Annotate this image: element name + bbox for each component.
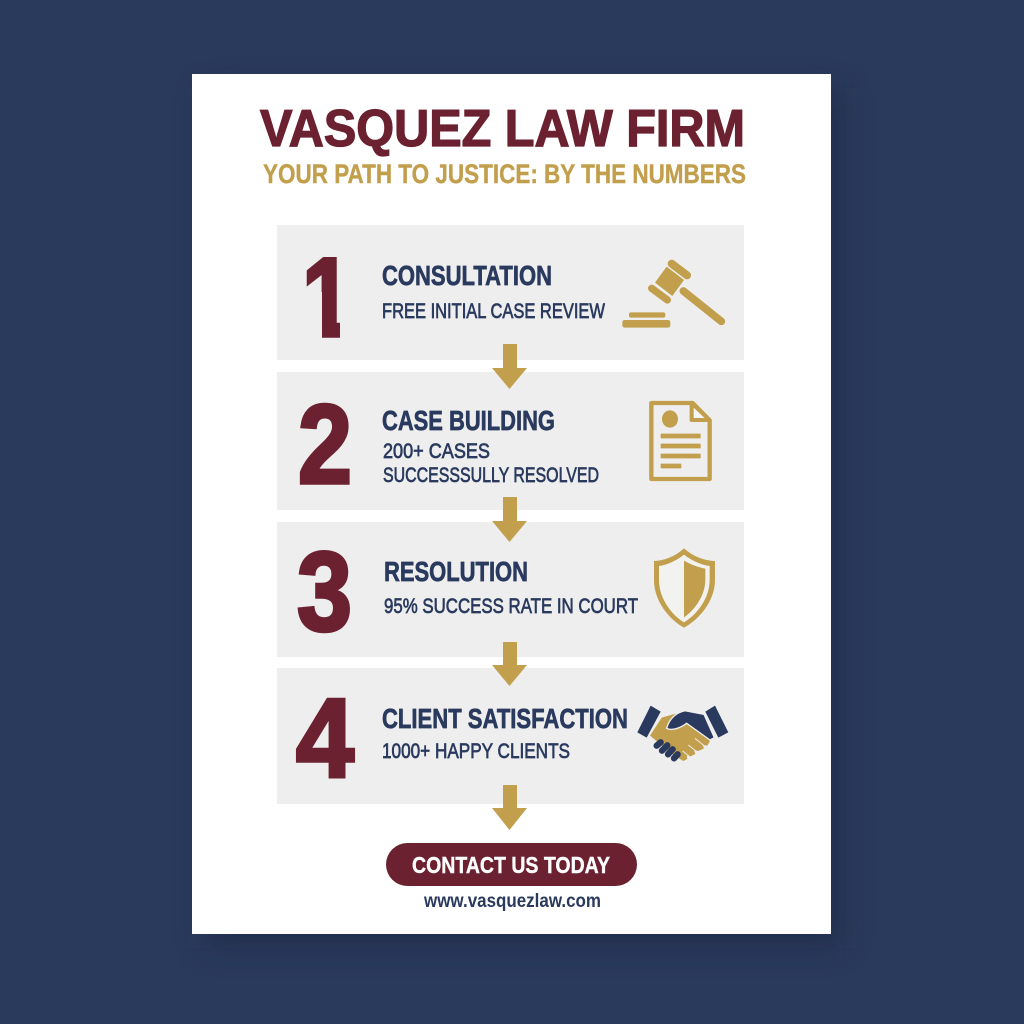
panel: step 3 resolution: [277, 522, 744, 657]
subtitle: YOUR PATH TO JUSTICE: BY THE NUMBERS: [263, 159, 746, 189]
arrow 3: [492, 642, 527, 686]
website url: www.vasquezlaw.com: [423, 891, 601, 912]
button: contact us today: [386, 843, 637, 886]
text: 1000+ happy clients: 1000+ HAPPY CLIENTS: [382, 740, 570, 763]
text: 200+ cases: 200+ CASES: [383, 440, 490, 463]
heading: resolution: RESOLUTION: [384, 556, 528, 587]
heading: client satisfaction: CLIENT SATISFACTION: [382, 703, 628, 734]
arrow 1: [492, 344, 527, 389]
panel: step 4 client satisfaction: [277, 668, 744, 804]
icon: document: [651, 403, 710, 479]
text: successfully resolved: SUCCESSSULLY RESOLVED: [383, 464, 599, 487]
text: 95% success rate: 95% SUCCESS RATE IN COURT: [384, 595, 638, 618]
panel: step 1 consultation: [277, 225, 744, 360]
number 1: 1: [302, 235, 352, 360]
panel: poster card: [192, 74, 831, 934]
arrow 2: [492, 497, 527, 542]
heading: case building: CASE BUILDING: [382, 405, 555, 436]
button: contact us today: CONTACT US TODAY: [412, 852, 610, 878]
number 3: 3: [297, 529, 352, 654]
icon: shield: [654, 548, 715, 628]
icon: gavel: [622, 264, 721, 328]
number 4: 4: [296, 676, 354, 801]
arrow 4: [492, 785, 527, 830]
number 2: 2: [298, 382, 352, 507]
title: VASQUEZ LAW FIRM: [260, 100, 745, 158]
text: free initial case review: FREE INITIAL CASE REVIEW: [382, 300, 605, 323]
panel: step 2 case building: [277, 372, 744, 510]
icon: handshake: [637, 706, 728, 761]
heading: consultation: CONSULTATION: [382, 260, 552, 291]
